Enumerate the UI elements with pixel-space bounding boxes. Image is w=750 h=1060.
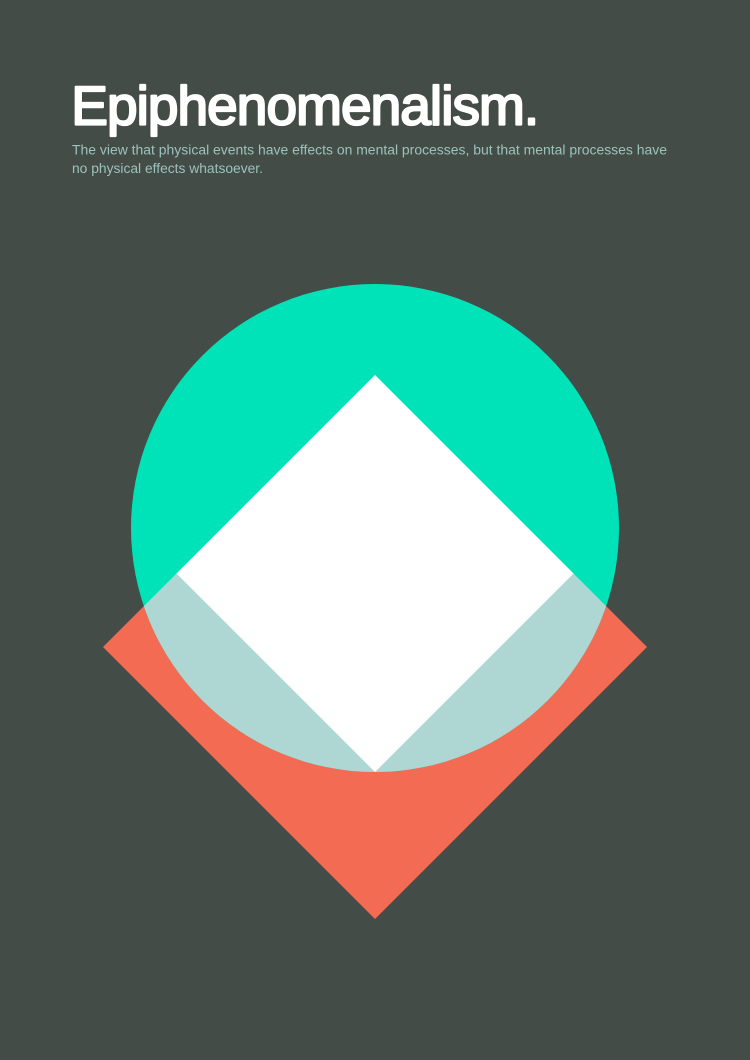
description text [72, 142, 667, 177]
title: Epiphenomenalism. [72, 75, 540, 137]
poster [72, 84, 666, 919]
white diamond [176, 375, 574, 772]
teal circle: mental processes [131, 284, 619, 772]
coral diamond: physical events [103, 375, 647, 919]
description text: The view that physical events have effects on mental processes, but that mental processes have [72, 142, 667, 158]
description text: no physical effects whatsoever. [72, 161, 263, 177]
geometric diagram [103, 284, 647, 919]
pale overlap of circle and diamond [144, 375, 606, 772]
title: Epiphenomenalism. [71, 74, 539, 136]
